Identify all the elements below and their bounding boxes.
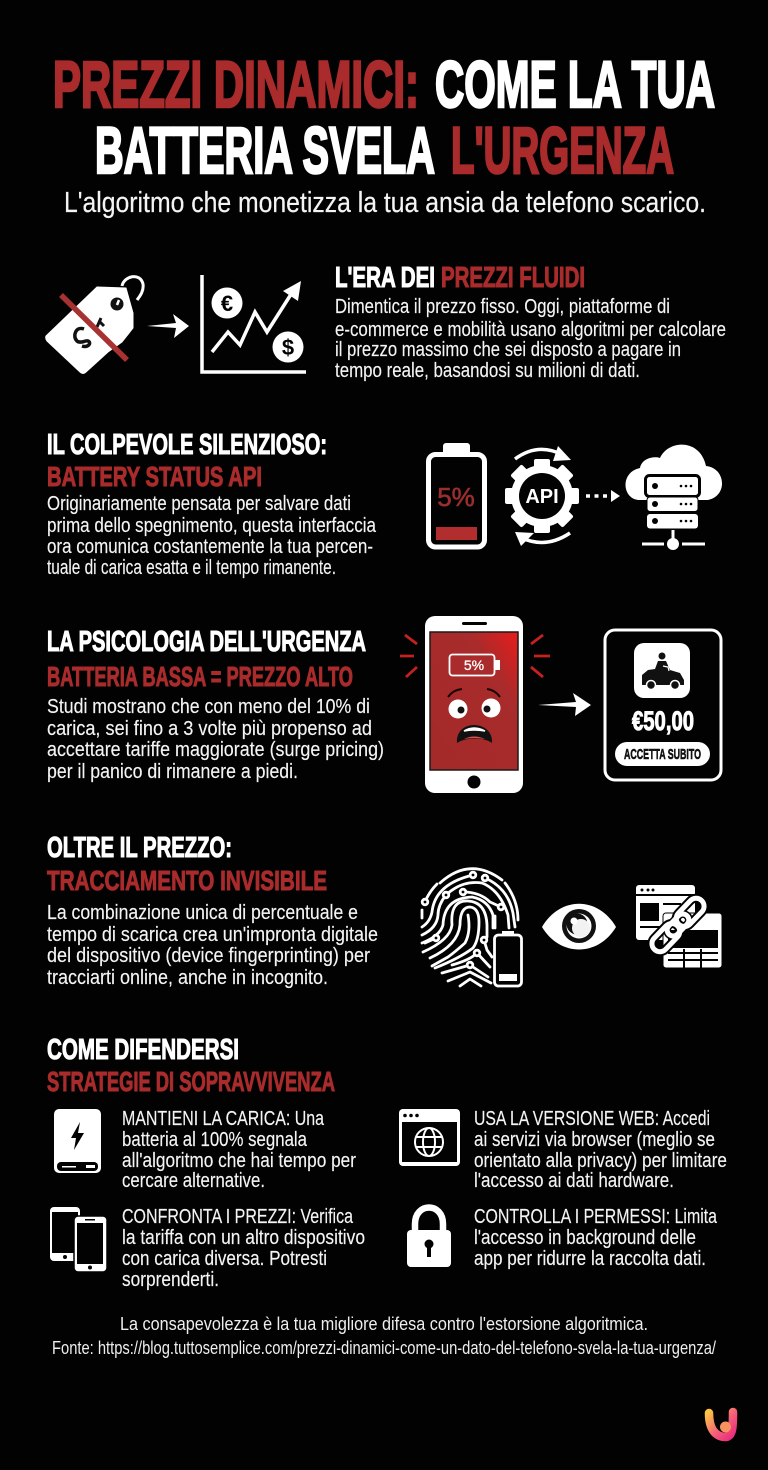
text block: tracciarti online, anche in incognito. — [47, 966, 328, 989]
heading — [47, 626, 366, 692]
heading — [47, 1034, 335, 1097]
icon: battery 5% — [428, 443, 484, 547]
text block: per il panico di rimanere a piedi. — [47, 760, 298, 783]
heading — [335, 262, 585, 294]
icon: crossed price tags — [46, 277, 143, 374]
text block: tempo reale, basandosi su milioni di dati. — [335, 359, 640, 382]
footer note: La consapevolezza è la tua migliore difesa contro l'estorsione algoritmica. — [120, 1314, 648, 1334]
tip: mantieni la carica: batteria al 100% segnala — [122, 1128, 307, 1151]
icon: price chart — [202, 275, 306, 372]
icon: price chart: $ — [282, 335, 294, 360]
icon: cloud server — [626, 445, 722, 550]
icon: api gear — [505, 446, 579, 546]
tip: mantieni la carica — [122, 1107, 356, 1192]
panel: psicologia dell'urgenza — [47, 616, 721, 793]
text block — [47, 901, 378, 989]
heading — [47, 832, 327, 896]
title: BATTERIA SVELA — [95, 113, 435, 187]
icon: panicked phone — [400, 616, 550, 793]
panel: prezzi fluidi — [46, 262, 726, 382]
icon: browser globe — [399, 1109, 460, 1166]
text block: del dispositivo (device fingerprinting) per — [47, 944, 370, 967]
tip: confronta i prezzi: la tariffa con un altro dispositivo — [122, 1226, 365, 1249]
title — [53, 47, 715, 187]
heading: BATTERY STATUS API — [47, 461, 262, 492]
price: €50,00 — [632, 706, 694, 736]
panel: tracciamento invisibile — [47, 832, 722, 989]
heading: BATTERIA BASSA = PREZZO ALTO — [47, 661, 353, 692]
tip: usa la versione web: ai servizi via browser (meglio se — [474, 1128, 715, 1151]
tip: confronta i prezzi: con carica diversa. Potresti — [122, 1247, 327, 1270]
tip: controlla i permessi: l'accesso in background delle — [474, 1226, 696, 1249]
text block: il prezzo massimo che sei disposto a pagare in — [335, 338, 681, 361]
logo — [709, 1412, 733, 1437]
icon: price chart: € — [221, 291, 233, 316]
tip: usa la versione web: orientato alla privacy) per limitare — [474, 1149, 727, 1172]
panel: battery status api — [47, 429, 722, 579]
tip: confronta i prezzi: sorprenderti. — [122, 1268, 219, 1291]
heading: OLTRE IL PREZZO: — [47, 832, 232, 864]
tip: controlla i permessi — [474, 1205, 717, 1270]
icon: fingerprint with battery — [422, 869, 522, 986]
heading: LA PSICOLOGIA DELL'URGENZA — [47, 626, 366, 658]
text block: tuale di carica esatta e il tempo rimanente. — [47, 556, 336, 579]
text block — [335, 295, 726, 382]
text block — [47, 695, 384, 783]
tip: mantieni la carica: MANTIENI LA CARICA: Una — [122, 1107, 324, 1130]
tip: usa la versione web: l'accesso ai dati hardware. — [474, 1169, 674, 1192]
icon: battery 5%: 5% — [437, 482, 475, 512]
text block: carica, sei fino a 3 volte più propenso ad — [47, 717, 372, 740]
icon: two phones — [50, 1207, 107, 1272]
arrow — [147, 314, 189, 338]
tip: controlla i permessi: app per ridurre la raccolta dati. — [474, 1247, 706, 1270]
button: ACCETTA SUBITO — [624, 746, 701, 763]
button — [615, 742, 710, 766]
tip: usa la versione web — [474, 1107, 727, 1192]
text block — [47, 492, 376, 579]
text block: accettare tariffe maggiorate (surge pricing) — [47, 738, 384, 761]
icon: api gear: API — [525, 486, 559, 508]
icon: eye — [542, 904, 616, 950]
tip: mantieni la carica: cercare alternative. — [122, 1169, 265, 1192]
arrow — [538, 693, 591, 716]
tip: confronta i prezzi: CONFRONTA I PREZZI: Verifica — [122, 1205, 353, 1228]
tip: confronta i prezzi — [122, 1205, 365, 1291]
text block: Dimentica il prezzo fisso. Oggi, piattaforme di — [335, 295, 670, 318]
icon: power bank — [54, 1109, 101, 1173]
heading: PREZZI FLUIDI — [441, 262, 585, 294]
text block: ora comunica costantemente la tua percen- — [47, 535, 373, 558]
heading: IL COLPEVOLE SILENZIOSO: — [47, 429, 327, 461]
heading: COME DIFENDERSI — [47, 1034, 239, 1066]
icon: padlock — [407, 1208, 451, 1267]
text block: tempo di scarica crea un'impronta digitale — [47, 923, 378, 946]
icon: linked browser windows — [636, 885, 722, 968]
text block: Studi mostrano che con meno del 10% di — [47, 695, 370, 718]
icon: car — [634, 643, 690, 698]
title: PREZZI DINAMICI: — [53, 47, 419, 121]
heading: TRACCIAMENTO INVISIBILE — [47, 865, 327, 896]
icon: panicked phone: 5% — [464, 657, 484, 673]
heading: STRATEGIE DI SOPRAVVIVENZA — [47, 1066, 335, 1097]
text block: La combinazione unica di percentuale e — [47, 901, 358, 924]
ride price card — [605, 630, 721, 780]
heading: L'ERA DEI — [335, 262, 435, 294]
text block: prima dello spegnimento, questa interfaccia — [47, 514, 376, 537]
text block: Originariamente pensata per salvare dati — [47, 492, 351, 515]
tip: mantieni la carica: all'algoritmo che hai tempo per — [122, 1149, 356, 1172]
panel: come difendersi — [47, 1034, 727, 1291]
heading — [47, 429, 327, 492]
arrow: dotted — [586, 490, 620, 502]
